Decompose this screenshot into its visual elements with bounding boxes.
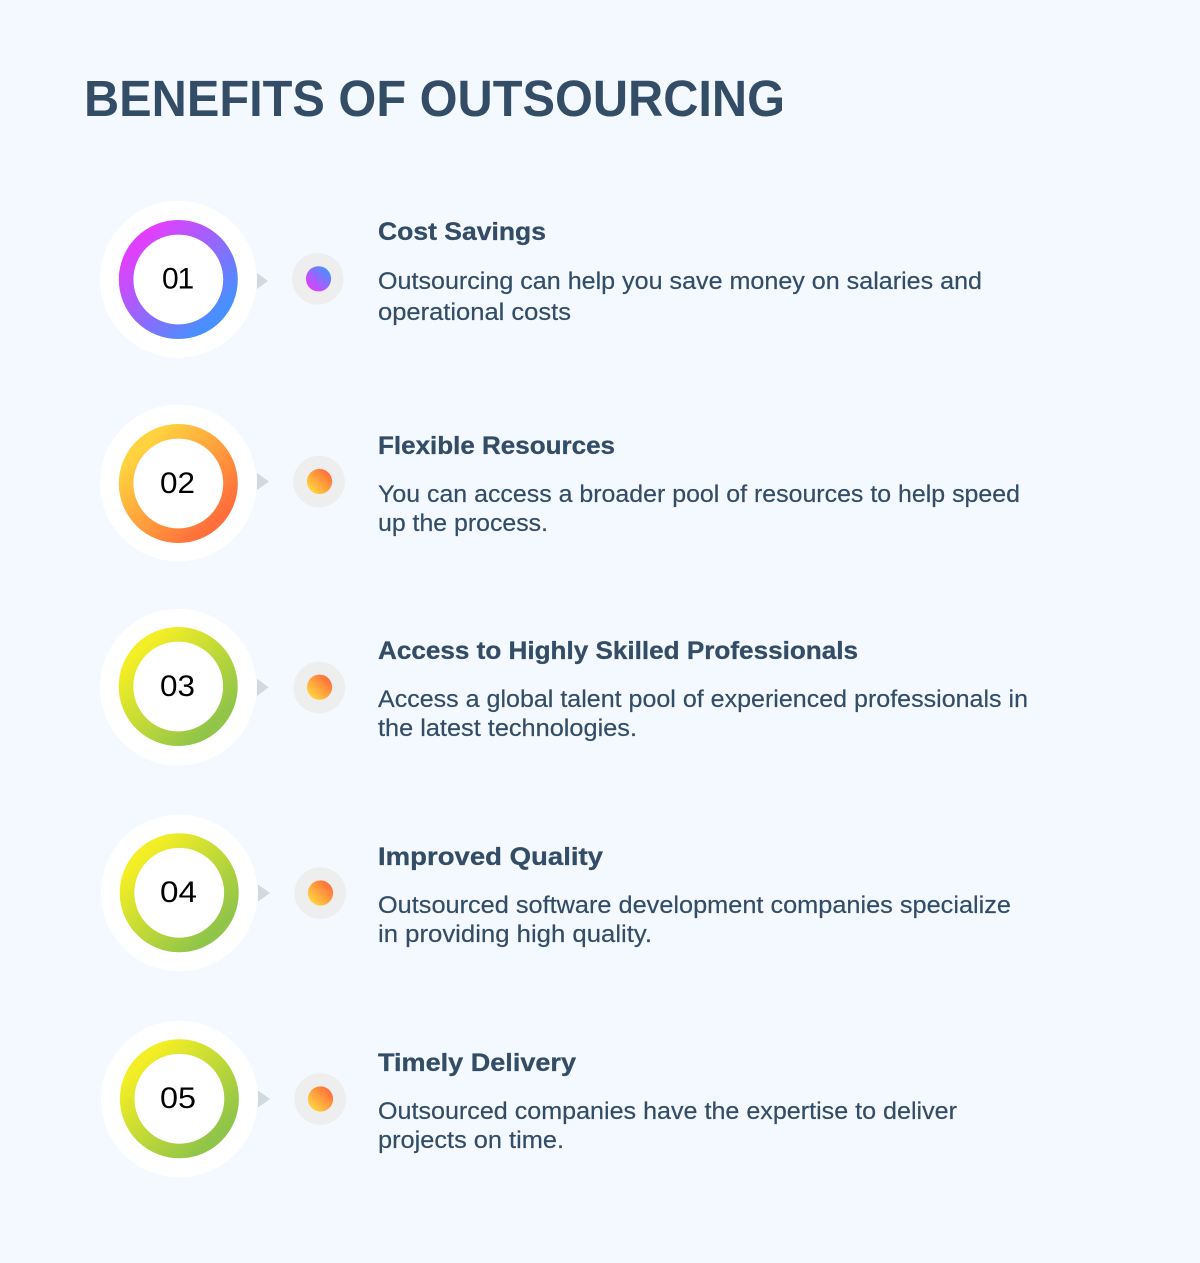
text block: Outsourced companies have the expertise to deliver [378, 1098, 957, 1125]
icon: number ring 04 [101, 815, 258, 971]
text block [378, 892, 1011, 948]
text block: You can access a broader pool of resources to help speed [378, 481, 1020, 508]
text block [378, 686, 1028, 742]
icon: number ring 02: 02 [160, 467, 195, 500]
icon: gradient dot [294, 867, 346, 919]
icon: number ring 05 [101, 1021, 258, 1177]
text block: the latest technologies. [378, 715, 637, 742]
icon: number ring 02 [100, 405, 257, 561]
arrow [257, 273, 268, 289]
text block [378, 1098, 957, 1154]
heading: Flexible Resources [378, 432, 615, 460]
text block [378, 481, 1020, 537]
arrow [258, 884, 270, 902]
icon: number ring 01 [100, 201, 257, 358]
title: BENEFITS OF OUTSOURCING [84, 70, 785, 127]
icon: number ring 03 [100, 609, 257, 766]
icon: gradient dot [294, 1073, 346, 1125]
text block: operational costs [378, 299, 571, 326]
heading: Access to Highly Skilled Professionals [378, 637, 858, 665]
text block: Outsourced software development companies specialize [378, 892, 1011, 919]
text block [378, 268, 982, 326]
panel: item 01 cost savings [100, 201, 982, 358]
icon: number ring 01: 1 [178, 262, 194, 296]
heading: Cost Savings [378, 218, 546, 246]
icon: number ring 01: 0 [162, 262, 179, 296]
icon: number ring 04: 04 [160, 876, 197, 909]
arrow [257, 679, 269, 696]
text block: up the process. [378, 510, 548, 537]
text block: Access a global talent pool of experienced professionals in [378, 686, 1028, 713]
panel: item 04 improved quality [101, 815, 1011, 971]
heading: Improved Quality [378, 843, 603, 871]
text block: in providing high quality. [378, 921, 652, 948]
panel: item 03 skilled professionals [100, 609, 1028, 766]
heading: Timely Delivery [378, 1049, 576, 1077]
icon: number ring 05: 05 [160, 1082, 196, 1115]
icon: gradient dot [292, 253, 344, 305]
text block: projects on time. [378, 1127, 564, 1154]
panel: item 02 flexible resources [100, 405, 1020, 561]
icon: gradient dot [293, 662, 345, 713]
arrow [258, 1090, 270, 1108]
arrow [257, 473, 269, 490]
icon: gradient dot [293, 456, 345, 507]
icon: number ring 03: 03 [160, 670, 195, 703]
text block: Outsourcing can help you save money on salaries and [378, 268, 982, 295]
panel: item 05 timely delivery [101, 1021, 957, 1177]
